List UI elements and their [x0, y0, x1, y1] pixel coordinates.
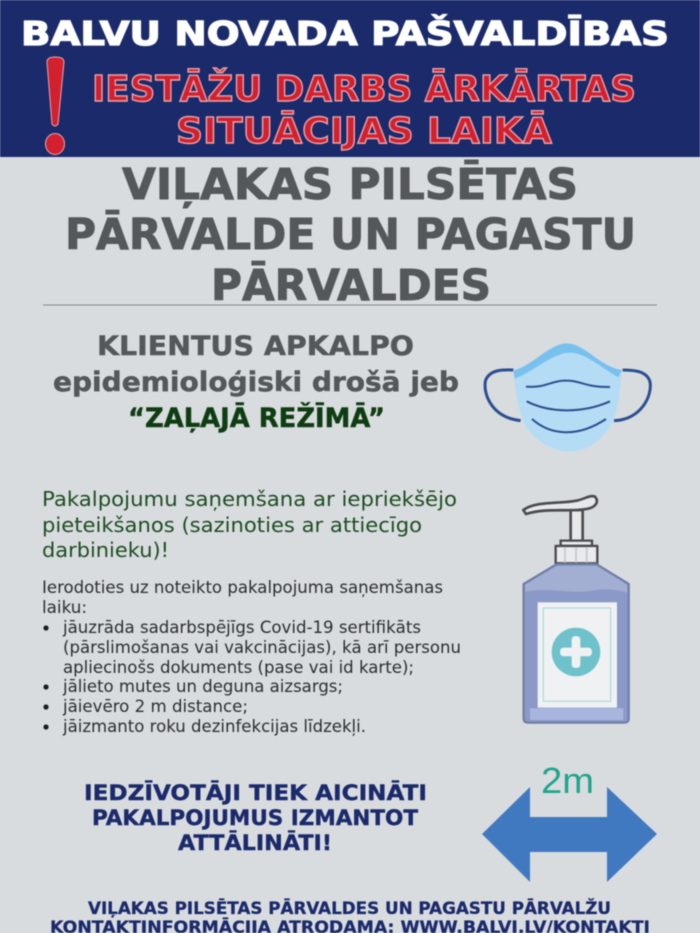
requirements text: jāuzrāda sadarbspējīgs Covid-19 sertifikāts	[62, 618, 421, 637]
main heading	[65, 160, 636, 311]
requirements text: (pārslimošanas vai vakcinācijas), kā arī personu	[63, 638, 461, 657]
icon: face mask	[485, 343, 650, 452]
service mode statement: epidemioloģiski drošā jeb	[53, 367, 459, 398]
requirements text: jāievēro 2 m distance;	[62, 697, 248, 716]
requirements text: Ierodoties uz noteikto pakalpojuma saņemšanas	[42, 578, 443, 597]
requirements bullets	[43, 625, 49, 730]
requirements text: laiku:	[42, 598, 87, 617]
main heading: VIĻAKAS PILSĒTAS	[122, 160, 578, 210]
icon: exclamation mark	[46, 57, 64, 154]
remote services call to action: ATTĀLINĀTI!	[178, 830, 332, 855]
requirements text: jālieto mutes un deguna aizsargs;	[62, 677, 343, 696]
footer contact info	[50, 897, 650, 933]
icon: sanitizer bottle	[523, 496, 629, 723]
distance label: 2m	[541, 760, 594, 801]
remote services call to action: PAKALPOJUMUS IZMANTOT	[92, 806, 419, 830]
remote services call to action	[84, 780, 427, 855]
appointment notice	[42, 487, 457, 562]
appointment notice: pieteikšanos (sazinoties ar attiecīgo	[42, 513, 422, 537]
requirements text	[42, 578, 461, 736]
service mode statement: “ZAĻAJĀ REŽĪMĀ”	[128, 402, 385, 434]
requirements text: apliecinošs dokuments (pase vai id karte);	[63, 658, 414, 677]
header subtitle	[92, 68, 636, 152]
main heading: PĀRVALDE UN PAGASTU	[65, 210, 636, 260]
requirements text: jāizmanto roku dezinfekcijas līdzekļi.	[62, 717, 366, 736]
icon: 2m distance arrow	[482, 760, 657, 882]
appointment notice: Pakalpojumu saņemšana ar iepriekšējo	[42, 487, 457, 511]
service mode statement	[53, 331, 459, 434]
footer contact info: VIĻAKAS PILSĒTAS PĀRVALDES UN PAGASTU PĀRVALŽU	[88, 897, 611, 919]
header panel	[0, 0, 700, 157]
remote services call to action: IEDZĪVOTĀJI TIEK AICINĀTI	[84, 780, 427, 805]
appointment notice: darbinieku)!	[42, 538, 169, 562]
header title: BALVU NOVADA PAŠVALDĪBAS	[21, 13, 669, 53]
header subtitle: IESTĀŽU DARBS ĀRKĀRTAS	[92, 68, 636, 110]
main heading: PĀRVALDES	[211, 261, 491, 311]
header subtitle: SITUĀCIJAS LAIKĀ	[176, 110, 552, 152]
service mode statement: KLIENTUS APKALPO	[97, 331, 414, 362]
